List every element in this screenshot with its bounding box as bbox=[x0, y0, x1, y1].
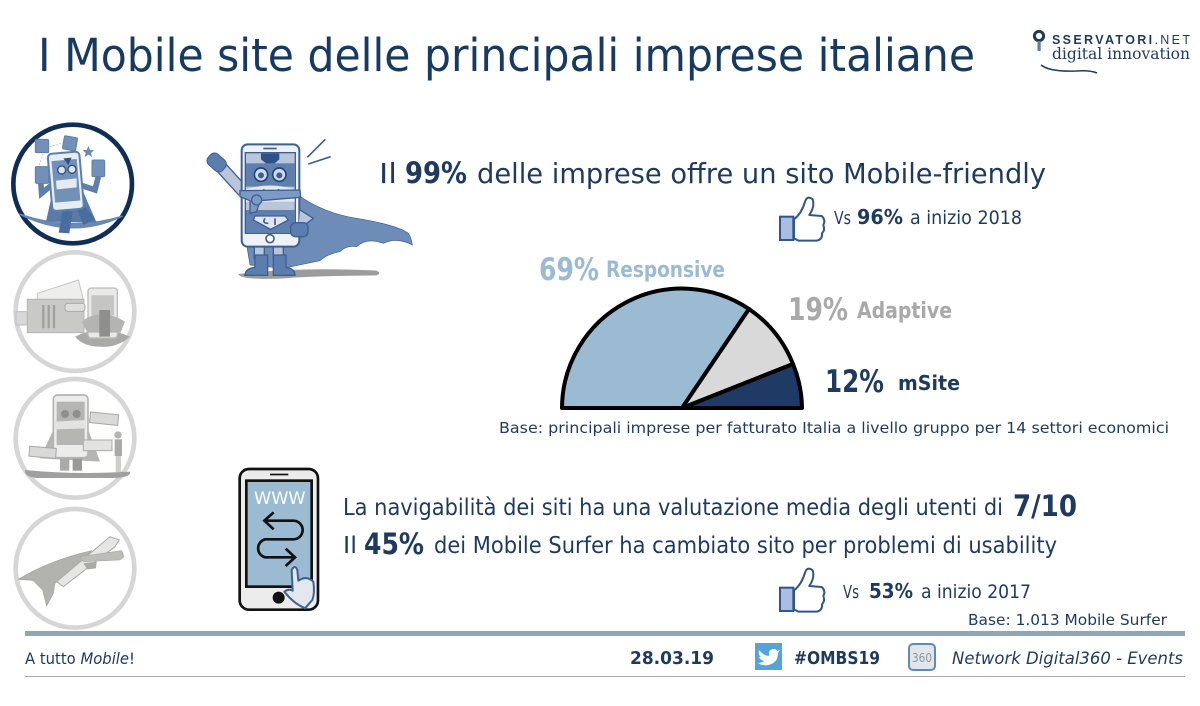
chart: semicircular pie of mobile site types bbox=[562, 289, 802, 408]
logo: Osservatori.net digital innovation: digital innovation bbox=[1052, 44, 1190, 63]
icon: thumbs up bbox=[780, 569, 824, 612]
comparison: Vs 53% bbox=[843, 579, 1031, 603]
raised arm bbox=[220, 166, 243, 192]
comparison: Vs 53%: a inizio 2017 bbox=[921, 581, 1031, 603]
note: chart base: Base: principali imprese per fatturato Italia a livello gruppo per 14 settori economici bbox=[499, 419, 1169, 437]
action marks bbox=[307, 139, 331, 164]
logo: Osservatori.net digital innovation: SSERVATORI.NET bbox=[1052, 33, 1190, 47]
comparison: Vs 96%: Vs bbox=[834, 208, 851, 229]
headline: 99% mobile-friendly: delle imprese offre un sito Mobile-friendly bbox=[477, 157, 1046, 190]
comparison: Vs 96%: 96% bbox=[857, 205, 903, 229]
title: I Mobile site delle principali imprese italiane bbox=[38, 29, 975, 82]
text: 45% changed site: dei Mobile Surfer ha cambiato sito per problemi di usability bbox=[434, 533, 1057, 559]
comparison: Vs 53%: 53% bbox=[869, 579, 913, 603]
footer: event name: A tutto Mobile! bbox=[25, 649, 135, 668]
icon: Digital360 logo: 360 bbox=[912, 651, 932, 665]
text: 45% changed site: Il bbox=[343, 533, 357, 559]
comparison: Vs 96%: a inizio 2018 bbox=[910, 207, 1022, 229]
phone body bbox=[242, 144, 299, 247]
icon: hero building with blocks, inactive section bbox=[16, 379, 134, 498]
note: surfer base: Base: 1.013 Mobile Surfer bbox=[968, 611, 1168, 629]
icon: Digital360 logo bbox=[909, 644, 935, 670]
text: navigability rating 7/10: 7/10 bbox=[1013, 489, 1077, 523]
text: 45% changed site bbox=[343, 527, 1057, 561]
shadow bbox=[238, 269, 379, 279]
label: 12% mSite: mSite bbox=[898, 371, 960, 395]
slice: mSite 12% bbox=[682, 364, 802, 408]
footer: network: Network Digital360 - Events bbox=[952, 649, 1183, 669]
hair bbox=[261, 153, 279, 163]
headline: 99% mobile-friendly: 99% bbox=[405, 156, 467, 190]
text: navigability rating 7/10: La navigabilità dei siti ha una valutazione media degli utenti di bbox=[343, 495, 1003, 521]
icon: juggling phone hero, active section bbox=[13, 125, 132, 243]
chest emblem bbox=[253, 216, 288, 229]
label: 19% Adaptive: Adaptive bbox=[857, 299, 952, 324]
text: 45% changed site: 45% bbox=[364, 527, 424, 561]
logo: Osservatori.net digital innovation bbox=[1034, 31, 1190, 73]
slice: Adaptive 19% bbox=[682, 309, 793, 408]
label: 69% Responsive: Responsive bbox=[606, 258, 725, 283]
icon: thumbs up bbox=[780, 198, 824, 241]
label: 19% Adaptive: 19% bbox=[788, 292, 848, 328]
footer: date: 28.03.19 bbox=[630, 648, 714, 669]
scarf bbox=[240, 190, 301, 213]
icon: phone with www navigation bbox=[240, 469, 318, 610]
comparison: Vs 53%: Vs bbox=[843, 582, 859, 603]
eyes bbox=[254, 168, 268, 181]
slice: Responsive 69% bbox=[562, 289, 749, 408]
legs and boots bbox=[254, 245, 264, 258]
label: 69% Responsive: 69% bbox=[539, 252, 599, 288]
icon: flying hero cape, inactive section bbox=[16, 509, 134, 628]
footer: hashtag: #OMBS19 bbox=[794, 648, 880, 669]
icon: hero with factory, inactive section bbox=[16, 252, 134, 371]
mask and smile bbox=[246, 185, 295, 202]
label: 12% mSite bbox=[825, 364, 960, 400]
label: 19% Adaptive bbox=[788, 292, 952, 328]
lowered arm and fist bbox=[298, 210, 313, 230]
icon: phone with www navigation: WWW bbox=[254, 489, 306, 508]
icon: twitter bbox=[755, 643, 782, 670]
icon: superhero smartphone with cape bbox=[205, 139, 412, 279]
label: 69% Responsive bbox=[539, 252, 725, 288]
headline: 99% mobile-friendly: Il bbox=[379, 157, 397, 190]
label: 12% mSite: 12% bbox=[825, 364, 884, 400]
cape bbox=[247, 194, 412, 268]
comparison: Vs 96% bbox=[834, 205, 1022, 229]
